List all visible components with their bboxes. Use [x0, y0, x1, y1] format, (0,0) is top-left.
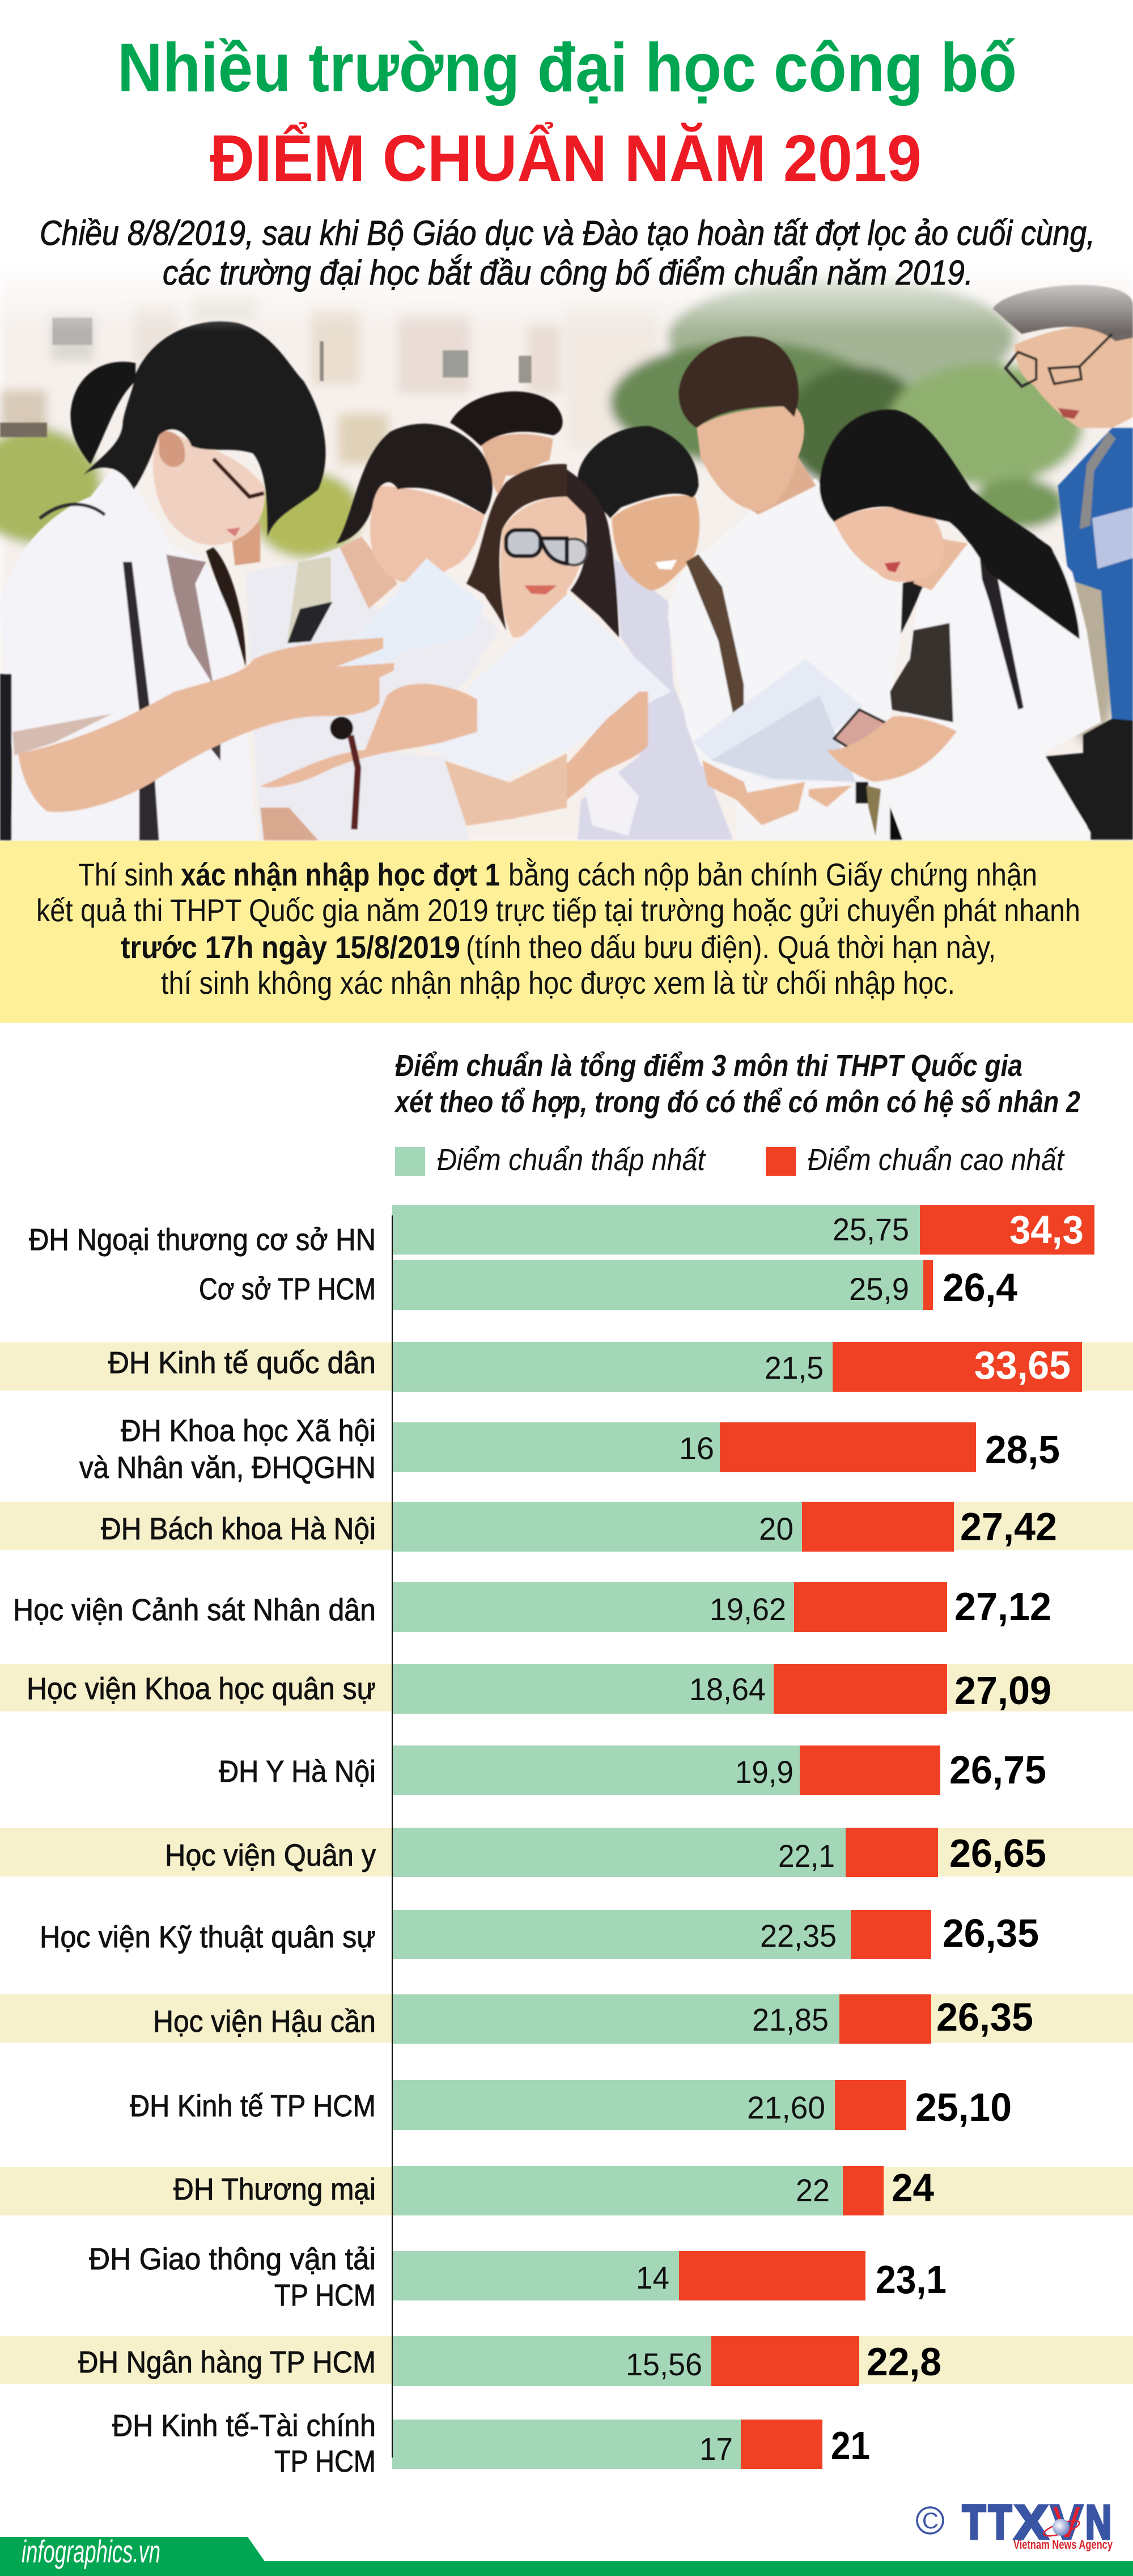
- laughing boy: [578, 558, 733, 840]
- row: ĐH Kinh tế-Tài chính TP HCM: TP HCM: [274, 2444, 376, 2478]
- row: ĐH Thương mại: [0, 2166, 1133, 2215]
- row: ĐH Ngân hàng TP HCM: ĐH Ngân hàng TP HCM: [78, 2345, 376, 2379]
- row: Học viện Hậu cần: [0, 1994, 1133, 2044]
- girl on the left: [231, 522, 260, 565]
- row: ĐH Ngoại thương cơ sở HN: [29, 1205, 1094, 1257]
- row: Học viện Kỹ thuật quân sự: 22,35: [760, 1918, 837, 1954]
- row: ĐH Thương mại: 24: [892, 2166, 934, 2210]
- panel: enrolment notice: xác nhận nhập học đợt 1: [181, 857, 500, 892]
- row: ĐH Ngân hàng TP HCM: 22,8: [867, 2340, 941, 2384]
- row: ĐH Kinh tế TP HCM: 21,60: [747, 2090, 825, 2125]
- row: Học viện Cảnh sát Nhân dân: [13, 1582, 1051, 1632]
- row: ĐH Bách khoa Hà Nội: 20: [759, 1511, 793, 1547]
- logo: TTXVN: N: [1085, 2496, 1111, 2549]
- legend: Điểm chuẩn cao nhất: [808, 1143, 1065, 1177]
- row: ĐH Khoa học Xã hội và Nhân văn: ĐH Khoa học Xã hội: [121, 1414, 376, 1448]
- row: Học viện Quân y: [0, 1828, 1133, 1877]
- row: ĐH Bách khoa Hà Nội: [0, 1502, 1133, 1552]
- legend: [395, 1143, 1065, 1177]
- row: Học viện Kỹ thuật quân sự: 26,35: [943, 1911, 1039, 1955]
- row: ĐH Kinh tế TP HCM: 25,10: [915, 2085, 1012, 2129]
- row: ĐH Thương mại: ĐH Thương mại: [173, 2172, 376, 2206]
- row: Học viện Khoa học quân sự: 18,64: [689, 1671, 766, 1707]
- row: ĐH Khoa học Xã hội và Nhân văn: 16: [679, 1430, 714, 1466]
- row: ĐH Y Hà Nội: 19,9: [735, 1754, 793, 1790]
- panel: enrolment notice: trước 17h ngày 15/8/2019: [121, 929, 460, 965]
- chart note: Điểm chuẩn là tổng điểm 3 môn thi THPT Quốc gia: [395, 1049, 1022, 1083]
- photo: students checking exam results: [0, 258, 1133, 845]
- logo: TTXVN: T: [962, 2496, 986, 2549]
- boy far right: [1058, 428, 1133, 721]
- row: Cơ sở TP HCM: 26,4: [943, 1265, 1017, 1310]
- row: Học viện Quân y: Học viện Quân y: [165, 1838, 376, 1872]
- footer band: infographics.vn: [22, 2533, 160, 2569]
- row: Học viện Hậu cần: 26,35: [936, 1995, 1033, 2039]
- logo: TTXVN: [962, 2496, 1113, 2552]
- row: ĐH Kinh tế-Tài chính TP HCM: [112, 2409, 870, 2478]
- row: Học viện Quân y: 26,65: [949, 1831, 1046, 1875]
- row: Cơ sở TP HCM: 25,9: [849, 1271, 909, 1307]
- row: ĐH Bách khoa Hà Nội: 27,42: [960, 1505, 1057, 1549]
- row: Học viện Quân y: 22,1: [778, 1838, 835, 1874]
- row: ĐH Ngân hàng TP HCM: 15,56: [626, 2346, 702, 2382]
- row: ĐH Kinh tế quốc dân: 21,5: [765, 1350, 824, 1386]
- row: ĐH Giao thông vận tải TP HCM: TP HCM: [274, 2278, 376, 2312]
- row: Học viện Khoa học quân sự: 27,09: [954, 1668, 1051, 1713]
- row: ĐH Bách khoa Hà Nội: ĐH Bách khoa Hà Nội: [101, 1512, 376, 1546]
- row: ĐH Giao thông vận tải TP HCM: 23,1: [876, 2257, 947, 2302]
- girl second left: [246, 548, 499, 840]
- girl with glasses, left half: [466, 464, 567, 630]
- icon: copyright: [917, 2507, 943, 2533]
- row: Cơ sở TP HCM: [199, 1260, 1017, 1310]
- row: Học viện Cảnh sát Nhân dân: 27,12: [954, 1584, 1051, 1629]
- row: Học viện Kỹ thuật quân sự: [40, 1910, 1039, 1959]
- papers: [382, 558, 484, 612]
- row: ĐH Kinh tế quốc dân: 33,65: [974, 1343, 1071, 1387]
- row: ĐH Y Hà Nội: 26,75: [949, 1748, 1046, 1792]
- icon: globe with orbit: [1042, 2518, 1081, 2539]
- panel: enrolment notice: [0, 841, 1133, 1023]
- chart note: [393, 1049, 1080, 1119]
- tall boy: [668, 478, 903, 840]
- row: Học viện Khoa học quân sự: Học viện Khoa học quân sự: [27, 1672, 376, 1706]
- row: ĐH Khoa học Xã hội và Nhân văn: 28,5: [985, 1427, 1060, 1472]
- row: Học viện Kỹ thuật quân sự: Học viện Kỹ thuật quân sự: [40, 1920, 376, 1954]
- icon: copyright: C: [922, 2509, 939, 2533]
- panel: enrolment notice: Thí sinh: [78, 857, 173, 892]
- legend: Điểm chuẩn thấp nhất: [437, 1143, 706, 1177]
- footer band: [0, 2533, 1133, 2576]
- row: ĐH Khoa học Xã hội và Nhân văn: và Nhân văn, ĐHQGHN: [79, 1451, 376, 1485]
- logo: TTXVN: X: [1015, 2496, 1048, 2549]
- intro text: các trường đại học bắt đầu công bố điểm chuẩn năm 2019.: [163, 253, 973, 292]
- row: ĐH Y Hà Nội: ĐH Y Hà Nội: [219, 1755, 376, 1789]
- title line 2: ĐIỂM CHUẨN NĂM 2019: [210, 121, 922, 195]
- row: ĐH Kinh tế quốc dân: ĐH Kinh tế quốc dân: [108, 1346, 376, 1380]
- row: Học viện Cảnh sát Nhân dân: 19,62: [710, 1591, 786, 1627]
- row: ĐH Kinh tế-Tài chính TP HCM: 17: [699, 2431, 733, 2467]
- panel: enrolment notice: (tính theo dấu bưu điện). Quá thời hạn này,: [466, 929, 996, 965]
- girl with glasses, right half: [567, 469, 619, 637]
- row: ĐH Kinh tế-Tài chính TP HCM: 21: [831, 2424, 870, 2468]
- row: ĐH Kinh tế quốc dân: [0, 1342, 1133, 1392]
- chart axis: [392, 1215, 393, 2458]
- row: ĐH Thương mại: 22: [796, 2172, 830, 2208]
- row: ĐH Khoa học Xã hội và Nhân văn: [79, 1414, 1060, 1485]
- papers, phone, hands: [693, 659, 863, 782]
- row: Học viện Hậu cần: Học viện Hậu cần: [153, 2005, 376, 2039]
- row: ĐH Ngân hàng TP HCM: [0, 2336, 1133, 2386]
- row: ĐH Ngoại thương cơ sở HN: 25,75: [833, 1211, 909, 1247]
- row: ĐH Kinh tế TP HCM: ĐH Kinh tế TP HCM: [130, 2089, 376, 2123]
- panel: enrolment notice: bằng cách nộp bản chính Giấy chứng nhận: [508, 857, 1037, 892]
- panel: enrolment notice: thí sinh không xác nhận nhập học được xem là từ chối nhập học.: [161, 965, 955, 1001]
- row: ĐH Giao thông vận tải TP HCM: 14: [636, 2260, 669, 2295]
- row: Học viện Cảnh sát Nhân dân: Học viện Cảnh sát Nhân dân: [13, 1593, 376, 1627]
- row: ĐH Ngoại thương cơ sở HN: ĐH Ngoại thương cơ sở HN: [29, 1223, 376, 1257]
- row: Học viện Khoa học quân sự: [0, 1664, 1133, 1714]
- intro text: [40, 214, 1095, 292]
- girl on the right: [885, 533, 1101, 840]
- boy behind: [481, 434, 553, 497]
- row: ĐH Giao thông vận tải TP HCM: ĐH Giao thông vận tải: [89, 2242, 376, 2276]
- row: ĐH Kinh tế TP HCM: [130, 2080, 1012, 2130]
- arms: [260, 684, 477, 787]
- row: ĐH Ngoại thương cơ sở HN: 34,3: [1009, 1208, 1084, 1252]
- row: ĐH Kinh tế-Tài chính TP HCM: ĐH Kinh tế-Tài chính: [112, 2409, 376, 2443]
- row: ĐH Giao thông vận tải TP HCM: [89, 2242, 947, 2312]
- row: Cơ sở TP HCM: Cơ sở TP HCM: [199, 1272, 376, 1306]
- title line 1: Nhiều trường đại học công bố: [117, 29, 1017, 106]
- row: ĐH Y Hà Nội: [219, 1745, 1046, 1795]
- logo: TTXVN: V: [1051, 2496, 1083, 2549]
- row: Học viện Hậu cần: 21,85: [752, 2002, 829, 2037]
- logo: TTXVN: T: [988, 2496, 1012, 2549]
